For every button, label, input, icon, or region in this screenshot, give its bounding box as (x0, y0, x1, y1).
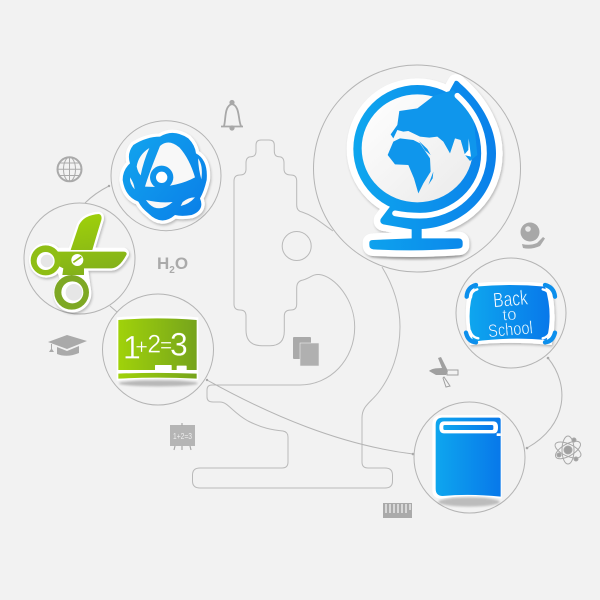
icon: scissors sticker (31, 214, 127, 310)
text: H2O: 2 (169, 265, 175, 276)
microscope lens circle (282, 232, 311, 260)
icon: bell (221, 101, 243, 130)
icon: mini chalkboard (170, 423, 195, 450)
icon: graduation cap (48, 335, 87, 356)
icon: atom sticker (123, 133, 207, 220)
back to school text: School (487, 317, 534, 341)
chalkboard text: = (160, 334, 172, 357)
chalkboard text: 1 (123, 330, 141, 366)
icon: small globe (58, 157, 82, 181)
back to school text: Back (492, 286, 529, 312)
atom white lobes (130, 142, 202, 208)
icon: stacked books (293, 337, 319, 366)
icon: mini chalkboard: 1+2=3 (173, 432, 192, 441)
chalkboard text: + (135, 335, 148, 359)
back to school text (485, 286, 534, 341)
circle: globe (314, 65, 520, 272)
arrowheads (108, 185, 549, 455)
back to school text: to (502, 304, 517, 325)
back to school corners (466, 285, 555, 342)
microscope outline (192, 140, 400, 488)
circle: book (414, 402, 525, 513)
connector lines (85, 186, 562, 454)
circle: chalkboard (102, 294, 214, 405)
chalkboard text: 2 (147, 332, 161, 359)
icon: small scissors (429, 357, 458, 387)
text: H2O: H (157, 254, 169, 273)
icon: small atom (553, 436, 583, 464)
circle: back to school (456, 258, 566, 368)
text: H2O: O (175, 254, 188, 273)
icon: back to school sticker (466, 282, 555, 345)
icon: school bell (520, 222, 545, 249)
icon: book sticker (432, 415, 502, 507)
circle: scissors (24, 203, 135, 314)
icon: chalkboard sticker (117, 316, 198, 386)
icon: keyboard (383, 503, 412, 518)
icon: globe sticker (353, 81, 496, 260)
circle: atom (111, 121, 221, 231)
chalkboard text: 3 (170, 326, 188, 362)
globe continents (388, 90, 477, 193)
